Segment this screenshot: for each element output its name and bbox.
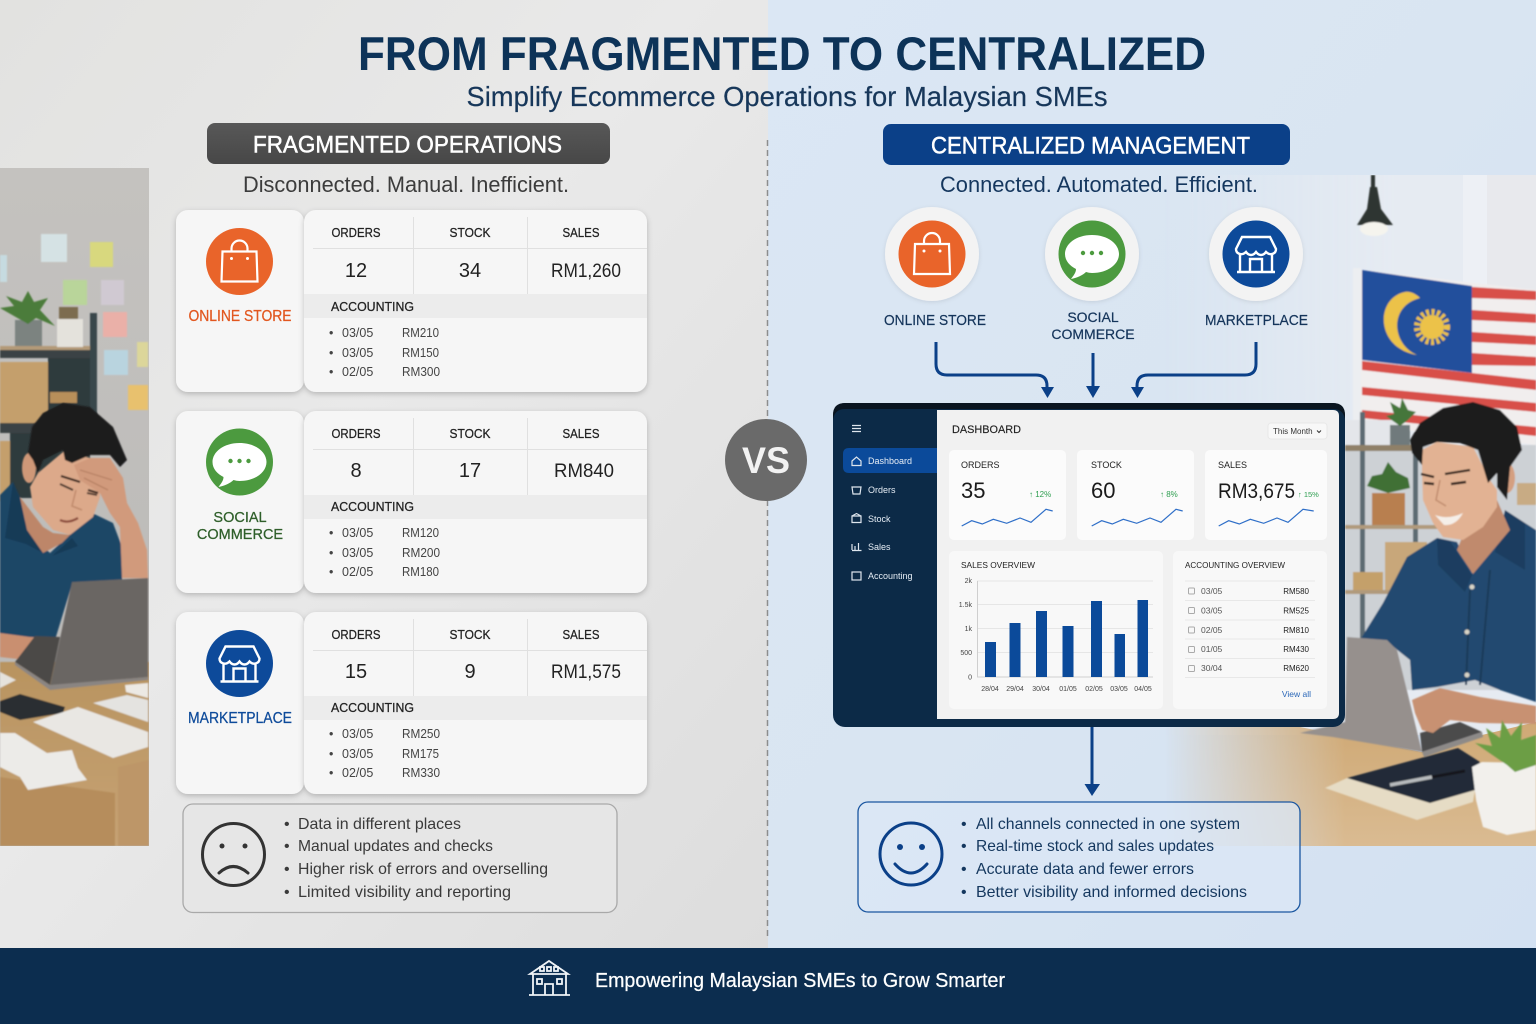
bar chart: sales overview: 0 [968, 674, 972, 682]
arrow: dashboard to benefits [1084, 727, 1100, 796]
table: accounting overview: 03/05 [1201, 586, 1223, 596]
icon card [176, 612, 304, 794]
dashboard title: DASHBOARD [952, 424, 1021, 436]
hair [28, 403, 127, 473]
sidebar navigation: Sales [868, 542, 891, 552]
list: • [284, 838, 290, 855]
list: • [961, 838, 967, 855]
hand and arm [74, 458, 148, 578]
data table card [304, 210, 647, 392]
table: accounting overview: RM810 [1283, 626, 1310, 635]
table text: ACCOUNTING [331, 701, 414, 715]
icon: happy face [880, 823, 942, 885]
KPI card: sales: ↑ 15% [1298, 490, 1319, 499]
VS badge: VS [742, 440, 790, 481]
table text: • [329, 766, 333, 780]
list: • [961, 816, 967, 833]
table text: RM120 [402, 526, 439, 540]
tagline: Empowering Malaysian SMEs to Grow Smarter [595, 970, 1005, 992]
photo: stressed business owner at cluttered desk [0, 168, 149, 846]
table text: • [329, 346, 333, 360]
table text [329, 427, 614, 579]
channel: social commerce [1045, 207, 1139, 342]
bar chart: sales overview: 04/05 [1134, 686, 1152, 693]
bar chart: sales overview [949, 551, 1163, 709]
list: Manual updates and checks [298, 838, 493, 855]
KPI card: stock: STOCK [1091, 460, 1122, 470]
table [0, 662, 149, 846]
table: accounting overview: 30/04 [1201, 663, 1223, 673]
table text: STOCK [450, 628, 491, 642]
bar chart: sales overview: SALES OVERVIEW [961, 560, 1035, 570]
label: COMMERCE [197, 527, 283, 543]
table text: RM250 [402, 727, 440, 741]
arm over laptop [0, 632, 35, 660]
sidebar navigation: Accounting [868, 571, 913, 581]
title: FROM FRAGMENTED TO CENTRALIZED [358, 27, 1206, 80]
KPI card: sales: RM3,675 [1218, 480, 1295, 503]
callout: benefits of centralized management [858, 802, 1300, 912]
KPI card: orders [949, 450, 1066, 540]
laptop [15, 636, 60, 685]
table: accounting overview: RM525 [1283, 606, 1310, 616]
table text: • [329, 526, 333, 540]
table: accounting overview: 02/05 [1201, 625, 1223, 635]
list: • [284, 884, 290, 901]
table text: STOCK [450, 226, 491, 240]
photo: happy business owner with laptop and Malaysian flag [1174, 175, 1536, 846]
bar chart: sales overview: 01/05 [1059, 686, 1077, 693]
period filter: This Month [1273, 427, 1313, 436]
arrows: channels into dashboard [936, 342, 1256, 398]
table: accounting overview: ACCOUNTING OVERVIEW [1185, 560, 1285, 570]
right tagline: Connected. Automated. Efficient. [940, 172, 1258, 197]
icon: storefront [206, 630, 273, 697]
left background [0, 0, 768, 948]
hair [1410, 402, 1522, 500]
shirt [1360, 523, 1536, 702]
sidebar navigation: Dashboard [868, 456, 912, 466]
bar chart: sales overview: 2k [965, 578, 972, 585]
boxes [0, 777, 115, 846]
table text: 02/05 [342, 365, 373, 379]
notebook and pen [1325, 777, 1476, 820]
bar chart: sales overview: 29/04 [1006, 686, 1024, 693]
subtitle: Simplify Ecommerce Operations for Malaysian SMEs [466, 81, 1108, 112]
KPI card: orders: ↑ 12% [1029, 490, 1051, 499]
table text [329, 226, 621, 379]
table text: RM180 [402, 565, 439, 579]
list: All channels connected in one system [976, 816, 1240, 833]
label: MARKETPLACE [188, 710, 292, 727]
facial features [61, 476, 98, 493]
potted plant [1472, 762, 1536, 835]
hands [1412, 688, 1536, 733]
callout: problems of fragmented operations [183, 804, 617, 912]
bar chart: sales overview: 500 [960, 650, 972, 657]
list [284, 816, 548, 901]
table text: 12 [345, 260, 367, 282]
list: • [961, 861, 967, 878]
icon: shopping bag [898, 220, 966, 288]
channel: marketplace [1205, 207, 1308, 329]
dashboard mockup [833, 403, 1345, 727]
KPI card: sales: SALES [1218, 460, 1247, 470]
table text: SALES [562, 628, 600, 642]
data table card [304, 411, 647, 593]
data table card [304, 612, 647, 794]
table text: • [329, 565, 333, 579]
KPI card: stock: ↑ 8% [1160, 490, 1178, 499]
channel: online store [884, 207, 986, 329]
lamp [1357, 175, 1393, 225]
icon card [176, 411, 304, 593]
table text: • [329, 747, 333, 761]
table: accounting overview: RM620 [1283, 664, 1310, 673]
list [961, 816, 1247, 901]
table text: 03/05 [342, 546, 373, 560]
KPI card: orders: 35 [961, 478, 985, 503]
bar chart: sales overview: 1k [965, 626, 972, 633]
table text: 8 [350, 460, 362, 482]
label: ONLINE STORE [884, 312, 986, 329]
icon: chat bubble [1058, 220, 1126, 288]
VS badge [725, 419, 807, 501]
label: SOCIAL [213, 510, 267, 526]
KPI card: stock [1077, 450, 1194, 540]
table text: ACCOUNTING [331, 500, 414, 514]
neck and face [1457, 500, 1510, 574]
table text: RM1,260 [551, 261, 621, 282]
table: accounting overview: 01/05 [1201, 644, 1223, 654]
icon: shopping bag [206, 228, 273, 295]
table text: RM200 [402, 546, 440, 560]
table: accounting overview: RM430 [1283, 645, 1310, 654]
panel: marketplace channel [176, 612, 647, 794]
bar chart: sales overview: 03/05 [1110, 686, 1128, 693]
icon card [176, 210, 304, 392]
table text: • [329, 365, 333, 379]
label [1051, 309, 1135, 342]
table text: 03/05 [342, 346, 373, 360]
table text: RM330 [402, 766, 440, 780]
list: • [961, 884, 967, 901]
label: MARKETPLACE [1205, 312, 1308, 329]
icon: sad face [202, 824, 264, 886]
table text: ORDERS [332, 427, 380, 441]
table text: ORDERS [332, 226, 380, 240]
bar chart: sales overview: 30/04 [1032, 686, 1050, 693]
label: SOCIAL [1067, 309, 1119, 325]
table text: 9 [464, 661, 476, 683]
bar chart: sales overview: 28/04 [981, 686, 999, 693]
heading: centralized management [883, 124, 1290, 165]
heading: centralized management: CENTRALIZED MANAGEMENT [931, 132, 1250, 160]
laptop [1300, 637, 1422, 752]
table: accounting overview: RM580 [1283, 587, 1310, 596]
table text: 34 [459, 260, 481, 282]
bar chart: sales overview: 02/05 [1085, 686, 1103, 693]
shelves and plants [1345, 445, 1536, 690]
table text: 03/05 [342, 526, 373, 540]
table text: RM210 [402, 326, 439, 340]
neck [20, 497, 70, 553]
panel: online store channel [176, 210, 647, 392]
list: Higher risk of errors and overselling [298, 861, 548, 878]
table text: STOCK [450, 427, 491, 441]
KPI card: orders: ORDERS [961, 460, 1000, 470]
list: Accurate data and fewer errors [976, 861, 1194, 878]
main area [937, 410, 1339, 719]
heading: fragmented operations: FRAGMENTED OPERATIONS [253, 132, 562, 158]
label: ONLINE STORE [188, 308, 292, 325]
table text: ORDERS [332, 628, 380, 642]
table text: • [329, 727, 333, 741]
table: accounting overview [1173, 551, 1327, 709]
list: • [284, 861, 290, 878]
table text: 02/05 [342, 565, 373, 579]
label [197, 510, 283, 543]
shirt [0, 482, 122, 640]
icon: chat bubble [206, 428, 273, 496]
sidebar navigation: Stock [868, 514, 891, 524]
table text [329, 628, 621, 780]
central dashed divider [766, 140, 768, 936]
left tagline: Disconnected. Manual. Inefficient. [243, 172, 569, 197]
table: accounting overview: View all [1282, 689, 1311, 699]
table text: 03/05 [342, 326, 373, 340]
table text: SALES [562, 427, 600, 441]
bar chart: sales overview: 1.5k [959, 602, 972, 609]
list: Limited visibility and reporting [298, 884, 511, 901]
footer banner [0, 948, 1536, 1024]
label: COMMERCE [1051, 326, 1135, 342]
table text: 03/05 [342, 747, 373, 761]
table text: • [329, 326, 333, 340]
face [30, 452, 100, 535]
table text: SALES [562, 226, 600, 240]
heading: fragmented operations [207, 123, 610, 164]
table text: RM300 [402, 365, 440, 379]
table text: • [329, 546, 333, 560]
table: accounting overview: 03/05 [1201, 606, 1223, 616]
phone calculator papers [0, 672, 16, 688]
icon: storefront [529, 961, 570, 995]
flag [1354, 269, 1361, 420]
period filter [1268, 423, 1327, 439]
table text: ACCOUNTING [331, 300, 414, 314]
sidebar navigation [843, 426, 937, 581]
table text: 03/05 [342, 727, 373, 741]
right background [768, 0, 1536, 948]
KPI card: sales [1205, 450, 1327, 540]
list: Data in different places [298, 816, 461, 833]
table text: RM1,575 [551, 662, 621, 683]
icon: storefront [1222, 220, 1290, 288]
KPI card: stock: 60 [1091, 478, 1115, 503]
list: Real-time stock and sales updates [976, 838, 1214, 855]
panel: social commerce channel [176, 411, 647, 593]
table text: 17 [459, 460, 481, 482]
list: Better visibility and informed decisions [976, 884, 1247, 901]
table text: RM175 [402, 747, 439, 761]
table text: RM840 [554, 461, 614, 482]
table text: RM150 [402, 346, 439, 360]
table text: 15 [345, 661, 367, 683]
list: • [284, 816, 290, 833]
sidebar navigation: Orders [868, 485, 896, 495]
table text: 02/05 [342, 766, 373, 780]
